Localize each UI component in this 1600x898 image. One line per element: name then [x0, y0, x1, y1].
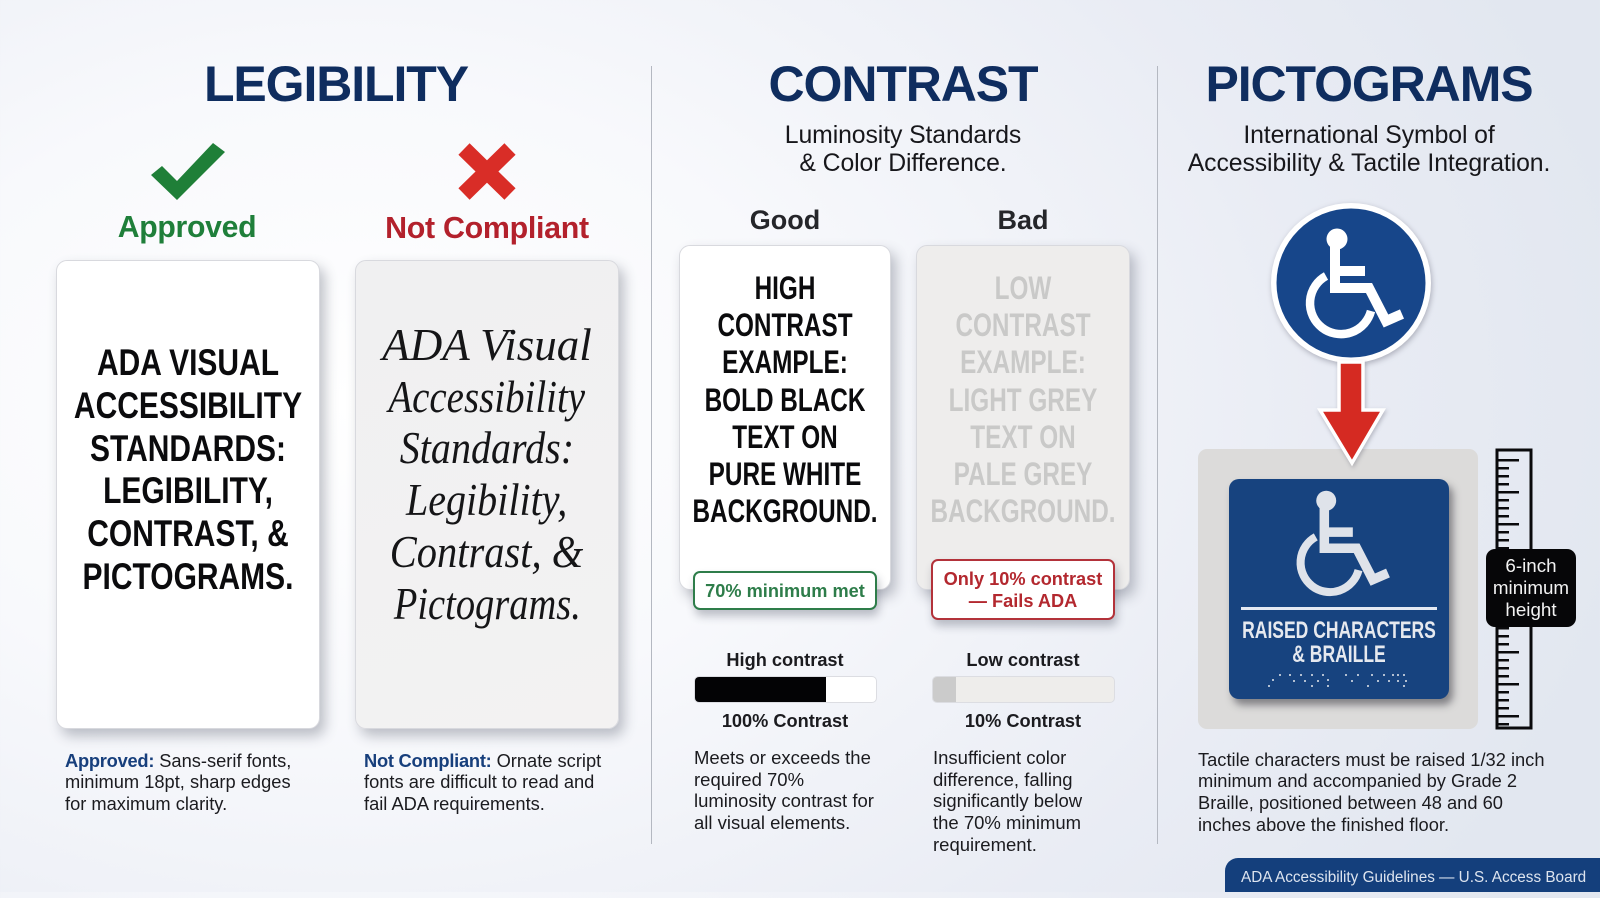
braille dots [1268, 674, 1407, 687]
badge: only 10% contrast: Only 10% contrast [944, 569, 1102, 589]
low contrast text: EXAMPLE: [960, 344, 1086, 380]
sign text [1242, 617, 1436, 668]
callout: 6-inch minimum height: height [1505, 599, 1557, 620]
footer source tag: ADA Accessibility Guidelines — U.S. Access Board [1241, 869, 1586, 886]
tactile description: Braille, positioned between 48 and 60 [1198, 792, 1503, 813]
card text: script [380, 320, 592, 629]
divider [650, 66, 652, 844]
card text: script: Accessibility [389, 372, 585, 422]
pictograms subtitle [1188, 122, 1550, 177]
card text: script: Standards: [400, 423, 574, 473]
not compliant description: fail ADA requirements. [364, 793, 545, 814]
bar fill: grey [933, 677, 956, 702]
low contrast text: LOW [995, 270, 1051, 306]
high contrast label: High contrast [726, 650, 844, 670]
pictograms subtitle: International Symbol of [1243, 122, 1495, 149]
high contrast text: EXAMPLE: [722, 344, 848, 380]
heading: contrast: CONTRAST [769, 56, 1037, 112]
high contrast value: 100% Contrast [722, 711, 848, 731]
badge: 70% minimum met: 70% minimum met [705, 581, 865, 601]
low contrast text: BACKGROUND. [930, 493, 1116, 529]
icon: wheelchair on sign [1296, 490, 1390, 596]
good description: required 70% [694, 769, 804, 790]
card text: sans-serif: ADA VISUAL [96, 342, 279, 383]
contrast subtitle [785, 122, 1021, 177]
low contrast bar [932, 676, 1115, 703]
label: bad: Bad [997, 204, 1048, 234]
contrast subtitle: Luminosity Standards [785, 122, 1021, 149]
bad description: the 70% minimum [933, 812, 1081, 833]
tactile description [1198, 748, 1544, 835]
low contrast text: CONTRAST [955, 307, 1091, 343]
tactile sign [1229, 479, 1449, 699]
card text: sans-serif: ACCESSIBILITY [73, 385, 302, 426]
panel: good contrast card [679, 245, 891, 590]
tactile description: Tactile characters must be raised 1/32 inch [1198, 748, 1544, 770]
low contrast text [930, 270, 1116, 529]
tactile description: minimum and accompanied by Grade 2 [1198, 770, 1517, 791]
high contrast text: HIGH [755, 270, 815, 306]
low contrast label: Low contrast [966, 650, 1080, 670]
good description: Meets or exceeds the [694, 747, 871, 768]
not compliant description [364, 750, 602, 814]
good description [694, 747, 874, 833]
low contrast text: PALE GREY [954, 456, 1092, 492]
heading: pictograms: PICTOGRAMS [1206, 56, 1532, 112]
bar fill: black [695, 677, 826, 702]
icon: red x mark [458, 143, 516, 200]
good description: all visual elements. [694, 812, 850, 833]
label: approved: Approved [118, 211, 256, 244]
high contrast text: TEXT ON [732, 419, 838, 455]
panel: bad contrast card [916, 245, 1130, 590]
panel: textured sign background [1198, 449, 1478, 729]
high contrast bar [694, 676, 877, 703]
sign divider line [1241, 607, 1437, 610]
high contrast text: BOLD BLACK [705, 382, 865, 418]
not compliant description: Not Compliant: Ornate script [364, 750, 601, 770]
low contrast text: TEXT ON [970, 419, 1076, 455]
arrow: red down arrow [1317, 361, 1388, 468]
card text: sans-serif: CONTRAST, & [87, 513, 288, 554]
callout: 6-inch minimum height: minimum [1493, 577, 1569, 598]
high contrast text: PURE WHITE [709, 456, 861, 492]
panel: approved sans-serif card [56, 260, 320, 729]
card text: script: ADA Visual [382, 320, 592, 370]
card text: script: Legibility, [406, 475, 568, 525]
contrast subtitle: & Color Difference. [799, 150, 1007, 177]
panel: not compliant script card [355, 260, 619, 729]
badge: only 10% contrast [931, 559, 1115, 620]
card text: script: Contrast, & [390, 527, 584, 577]
sign text: & BRAILLE [1292, 641, 1386, 668]
icon: wheelchair symbol circle [1269, 202, 1435, 367]
not compliant description: fonts are difficult to read and [364, 771, 594, 792]
approved description [65, 750, 291, 814]
bad description: significantly below [933, 790, 1082, 811]
badge: 70% minimum met [693, 571, 877, 610]
pictograms subtitle: Accessibility & Tactile Integration. [1188, 150, 1550, 177]
high contrast text [692, 270, 878, 529]
bad description: difference, falling [933, 769, 1073, 790]
tactile description: inches above the finished floor. [1198, 814, 1449, 835]
footer source tag [1225, 858, 1600, 892]
low contrast text: LIGHT GREY [949, 382, 1097, 418]
bad description: Insufficient color [933, 747, 1066, 768]
good description: luminosity contrast for [694, 790, 874, 811]
ruler [1496, 448, 1532, 730]
icon: green check mark [151, 143, 225, 200]
card text: sans-serif: LEGIBILITY, [103, 470, 272, 511]
label: not compliant: Not Compliant [385, 211, 589, 245]
low contrast value: 10% Contrast [965, 711, 1081, 731]
card text: sans-serif [73, 342, 302, 597]
approved description: Approved: Sans-serif fonts, [65, 750, 291, 770]
callout: 6-inch minimum height: 6-inch [1505, 555, 1557, 576]
badge: only 10% contrast: — Fails ADA [969, 591, 1077, 611]
label: good: Good [750, 204, 820, 234]
callout: 6-inch minimum height [1486, 549, 1576, 627]
bad description [933, 747, 1082, 855]
heading: legibility: LEGIBILITY [204, 56, 468, 112]
approved description: minimum 18pt, sharp edges [65, 771, 291, 792]
sign text: RAISED CHARACTERS [1242, 617, 1436, 644]
high contrast text: CONTRAST [717, 307, 853, 343]
approved description: for maximum clarity. [65, 793, 227, 814]
bad description: requirement. [933, 834, 1037, 855]
card text: sans-serif: PICTOGRAMS. [82, 556, 293, 597]
card text: sans-serif: STANDARDS: [90, 428, 285, 469]
high contrast text: BACKGROUND. [692, 493, 878, 529]
card text: script: Pictograms. [393, 579, 581, 629]
